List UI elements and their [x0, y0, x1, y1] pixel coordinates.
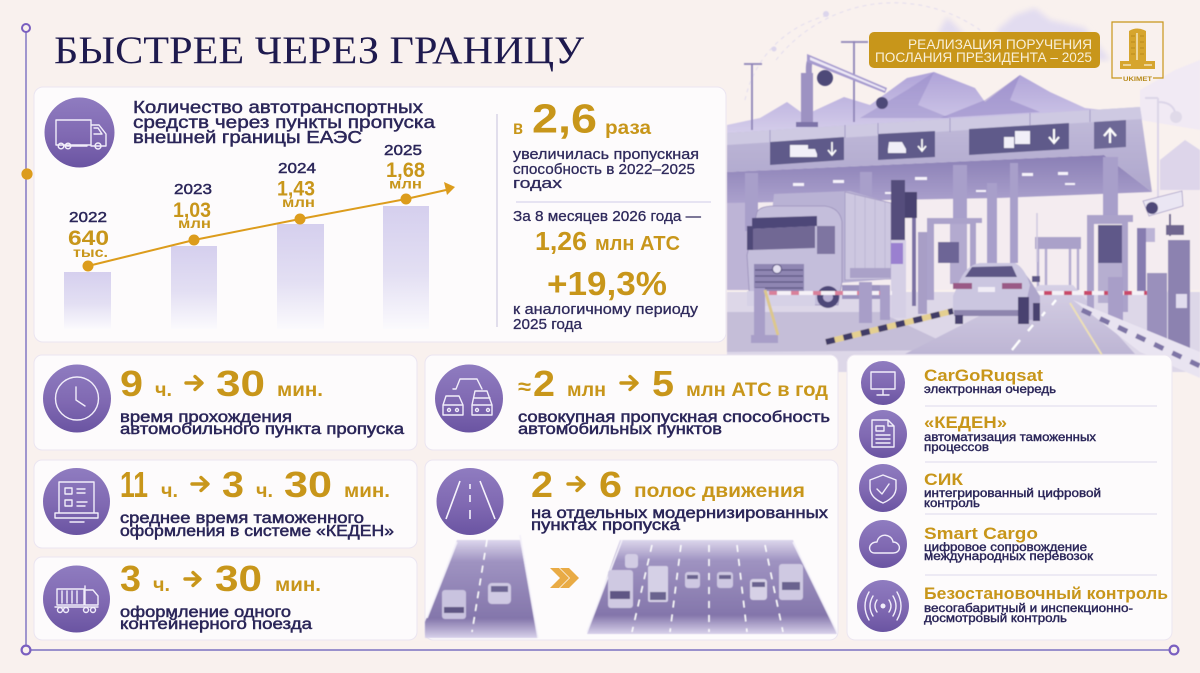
bar chart: 2025 [384, 143, 422, 159]
callout: capacity growth: млн АТС [595, 233, 680, 255]
signs [770, 120, 1126, 165]
item: non-stop control: досмотровый контроль [924, 611, 1067, 625]
title: БЫСТРЕЕ ЧЕРЕЗ ГРАНИЦУ [54, 29, 584, 72]
value: 9 h to 30 min: 9 [120, 363, 143, 404]
arrow: double chevron [550, 568, 579, 588]
value: 3 h to 30 min: 3 [120, 558, 141, 599]
callout: capacity growth: 2,6 [532, 96, 597, 142]
badge: president's address: РЕАЛИЗАЦИЯ ПОРУЧЕНИЯ [908, 36, 1092, 52]
value: about 2 mln to 5 mln vehicles per year: млн [567, 380, 606, 401]
callout: capacity growth: способность в 2022–2025 [513, 161, 695, 178]
value: 2 to 6 lanes [531, 464, 805, 505]
description: на отдельных модернизированных [531, 505, 828, 522]
description: среднее время таможенного [120, 510, 364, 527]
booths [927, 215, 1133, 312]
item: CarGoRuqsat: электронная очередь [924, 382, 1056, 396]
value: 2 to 6 lanes: 2 [531, 464, 553, 505]
bar chart: тыс. [73, 244, 108, 260]
item: SIK: СИК [924, 470, 964, 489]
roadside camera [1143, 191, 1183, 216]
callout: capacity growth: За 8 месяцев 2026 года — [513, 208, 701, 225]
illustration: six-lane road [587, 540, 837, 634]
value: 11 h to 3 h 30 min: мин. [344, 481, 390, 502]
description: оформление одного [120, 604, 291, 621]
value: 11 h to 3 h 30 min: 11 [120, 464, 148, 505]
canopy [727, 155, 1152, 203]
icon: cars [435, 364, 503, 432]
value: about 2 mln to 5 mln vehicles per year: 5 [652, 363, 674, 404]
description [518, 409, 830, 438]
callout: capacity growth: 2025 года [513, 316, 583, 333]
description: совокупная пропускная способность [518, 409, 830, 426]
item: Smart Cargo [859, 520, 1094, 568]
value: 9 h to 30 min: ч. [155, 380, 172, 401]
description [120, 510, 394, 540]
bar chart: 2023 [174, 182, 212, 198]
value: 11 h to 3 h 30 min: ч. [256, 481, 273, 502]
panel heading [133, 97, 435, 147]
item: SIK [859, 464, 1101, 512]
item: non-stop control: весогабаритный и инспекционно- [924, 601, 1133, 615]
value: 2 to 6 lanes: 6 [599, 464, 622, 505]
value: 3 h to 30 min: мин. [275, 575, 321, 596]
ground [727, 292, 1200, 372]
columns [745, 157, 1118, 263]
bar chart: млн [178, 215, 211, 231]
value: 11 h to 3 h 30 min: 3 [222, 464, 244, 505]
truck [747, 191, 897, 308]
bar chart: 640 [68, 227, 109, 250]
callout: capacity growth: раза [605, 118, 651, 139]
value: 9 h to 30 min: 30 [216, 363, 265, 404]
panel heading: средств через пункты пропуска [133, 112, 435, 132]
item: KEDEN [859, 410, 1096, 458]
value: 3 h to 30 min [120, 558, 321, 599]
illustration: border checkpoint with canopy, truck and car [727, 3, 1200, 378]
item: Smart Cargo: международных перевозок [924, 549, 1094, 563]
badge: president's address [869, 32, 1100, 68]
bar chart: млн [282, 194, 315, 210]
callout: capacity growth: к аналогичному периоду [513, 301, 699, 318]
panel: container train processing [34, 557, 417, 640]
description: автомобильных пунктов [518, 421, 722, 438]
icon: laptop with form [43, 468, 110, 535]
curbs [826, 311, 953, 342]
bar chart: 1,03 [173, 199, 211, 222]
icon: clock [43, 364, 111, 432]
item: Smart Cargo: Smart Cargo [924, 524, 1038, 543]
callout: capacity growth [497, 96, 711, 333]
callout: capacity growth: 1,26 [535, 226, 587, 256]
value: 9 h to 30 min [120, 363, 323, 404]
panel: combined capacity [425, 355, 838, 450]
description: пунктах пропуска [531, 517, 680, 534]
callout: capacity growth: в [513, 118, 523, 139]
item: CarGoRuqsat: CarGoRuqsat [924, 366, 1043, 385]
panel: vehicles through EAEU border crossings [34, 87, 726, 342]
value: 3 h to 30 min: 30 [215, 558, 262, 599]
item: CarGoRuqsat [861, 361, 1056, 405]
value: 2 to 6 lanes: полос движения [634, 481, 805, 502]
bar chart: 1,43 [277, 178, 315, 200]
value: about 2 mln to 5 mln vehicles per year: 2 [533, 363, 555, 404]
bar chart: 2024 [278, 161, 316, 177]
panel heading: Количество автотранспортных [133, 97, 423, 117]
car [953, 263, 1040, 324]
logo: UKIMET [1112, 22, 1163, 83]
item: Smart Cargo: цифровое сопровождение [924, 540, 1087, 554]
item: KEDEN: «КЕДЕН» [924, 413, 1007, 432]
value: 11 h to 3 h 30 min: ч. [161, 481, 178, 502]
bar chart: млн [389, 176, 422, 192]
description [120, 409, 404, 438]
panel: digital services [847, 355, 1172, 640]
description: оформления в системе «КЕДЕН» [120, 523, 394, 540]
item: SIK: интегрированный цифровой [924, 486, 1101, 500]
description: контейнерного поезда [120, 616, 312, 633]
central bollard column [891, 180, 905, 240]
value: about 2 mln to 5 mln vehicles per year [518, 363, 828, 404]
panel: customs clearance time [34, 460, 417, 548]
icon: container truck [43, 566, 110, 632]
item: SIK: контроль [924, 496, 980, 510]
value: 11 h to 3 h 30 min: 30 [284, 464, 332, 505]
value: about 2 mln to 5 mln vehicles per year: млн АТС в год [686, 380, 828, 401]
panel: traffic lanes [425, 460, 838, 640]
value: 9 h to 30 min: мин. [277, 380, 323, 401]
value: 11 h to 3 h 30 min [120, 464, 390, 505]
item: non-stop control [857, 580, 1168, 632]
description [531, 505, 828, 534]
description: автомобильного пункта пропуска [120, 421, 404, 438]
bar chart: 1,68 [386, 159, 425, 182]
description [120, 604, 312, 633]
mountains [727, 72, 1120, 150]
panel: checkpoint passing time [34, 355, 417, 450]
callout: capacity growth: +19,3% [547, 265, 667, 302]
item: KEDEN: процессов [924, 440, 989, 454]
value: about 2 mln to 5 mln vehicles per year: ≈ [518, 374, 531, 399]
far-scene portal [1035, 237, 1081, 249]
illustration: two-lane road [425, 535, 538, 638]
bollards and barriers [769, 291, 892, 295]
icon: truck [44, 98, 114, 168]
value: 3 h to 30 min: ч. [153, 575, 170, 596]
callout: capacity growth: годах [513, 175, 563, 192]
gantry camera [801, 73, 813, 125]
logo: UKIMET: UKIMET [1123, 76, 1152, 83]
icon: road [436, 468, 504, 535]
bar chart: 2022 [69, 210, 107, 226]
callout: capacity growth: увеличилась пропускная [513, 146, 699, 163]
panel heading: внешней границы ЕАЭС [133, 127, 362, 147]
item: non-stop control: Безостановочный контроль [924, 584, 1168, 603]
description: время прохождения [120, 409, 292, 426]
badge: president's address: ПОСЛАНИЯ ПРЕЗИДЕНТА – 2025 [875, 49, 1092, 65]
lamp poles [744, 41, 1175, 200]
item: KEDEN: автоматизация таможенных [924, 430, 1096, 444]
bar chart [64, 143, 455, 329]
